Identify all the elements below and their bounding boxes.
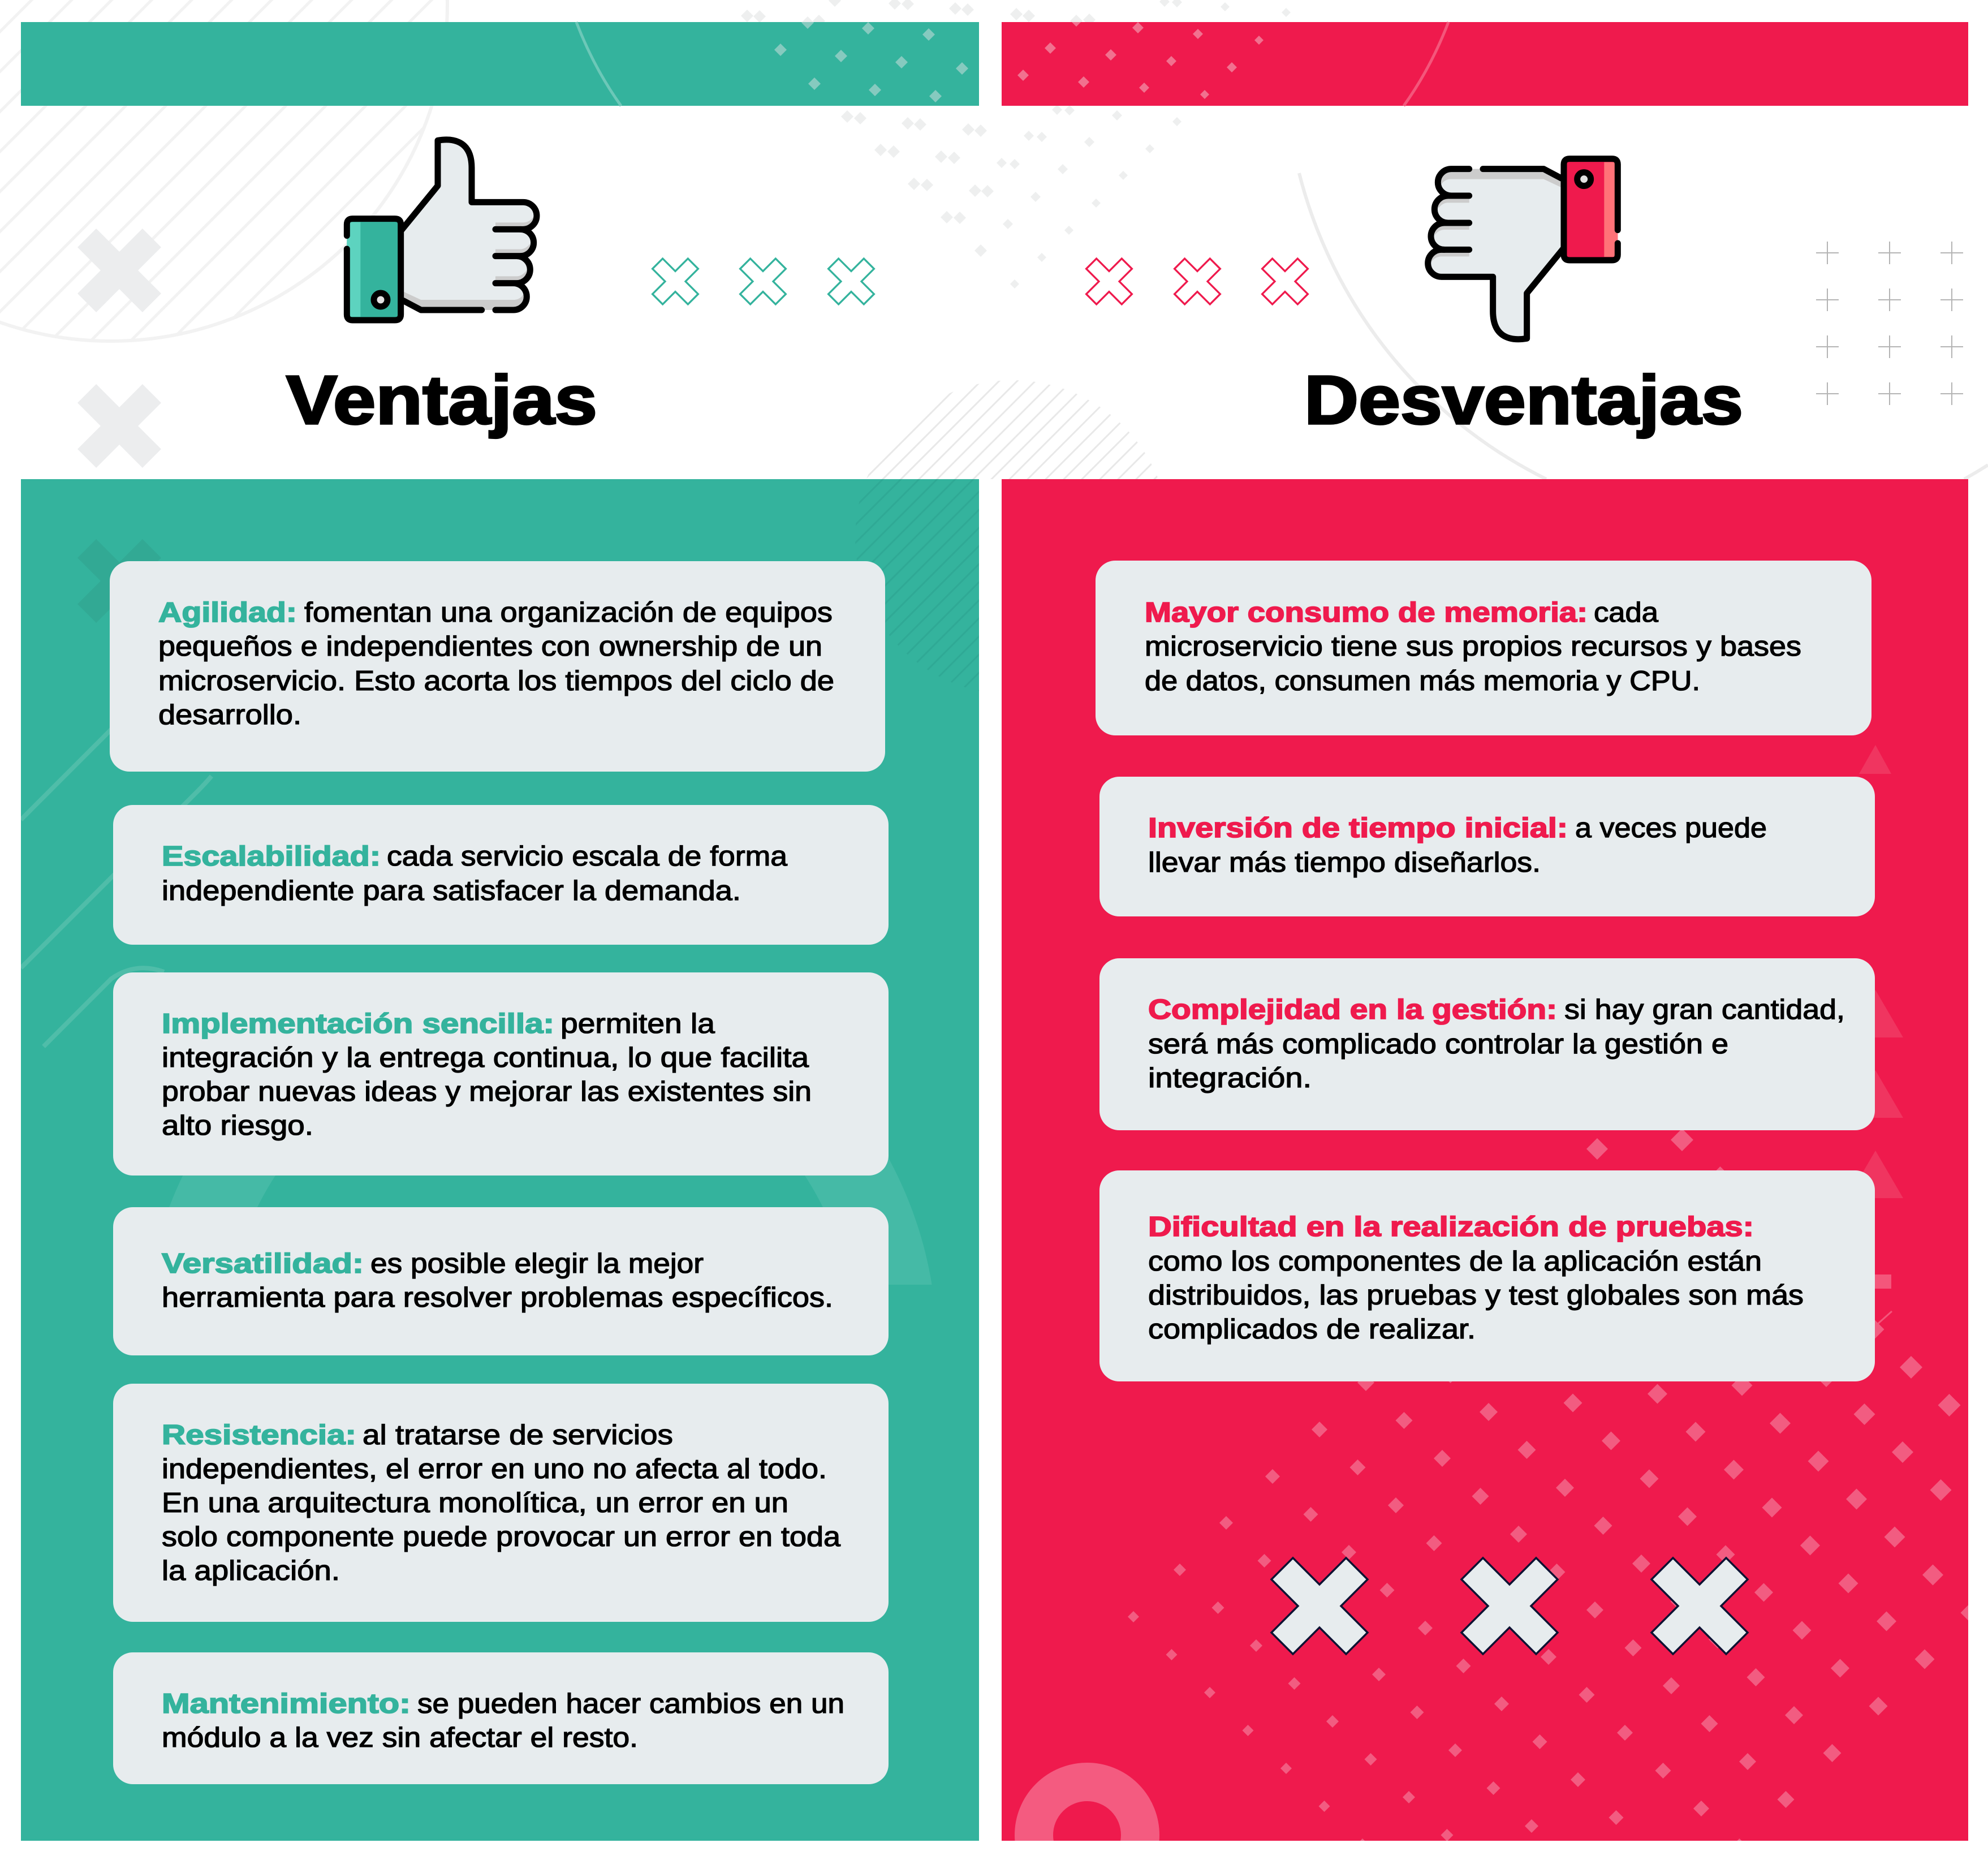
text: Versatilidad <box>162 1248 833 1313</box>
background decoration <box>0 0 1988 479</box>
background X marks <box>77 229 161 468</box>
card: Escalabilidad <box>113 805 889 945</box>
text: Escalabilidad: independiente para satisfacer la demanda. <box>162 876 741 906</box>
icon: plus grid <box>1816 242 1963 405</box>
card: Mantenimiento <box>113 1652 889 1784</box>
text: Dificultad en la realización de pruebas: complicados de realizar. <box>1148 1314 1476 1345</box>
text: Escalabilidad <box>162 841 788 906</box>
label: Complejidad en la gestión: Complejidad en la gestión: <box>1148 994 1557 1025</box>
title: Ventajas: Ventajas <box>286 361 597 438</box>
text: Dificultad en la realización de pruebas: como los componentes de la aplicación están <box>1148 1246 1762 1277</box>
text: Complejidad en la gestión: si hay gran cantidad, <box>1564 994 1845 1025</box>
text: Mantenimiento: se pueden hacer cambios en un <box>417 1689 844 1719</box>
text: Implementación sencilla <box>162 1009 812 1141</box>
label: Inversión de tiempo inicial: Inversión de tiempo inicial: <box>1148 813 1568 843</box>
icon: red outlined X row <box>1086 259 1308 304</box>
panel: desventajas <box>1002 479 1988 1873</box>
label: Mayor consumo de memoria: Mayor consumo de memoria: <box>1145 597 1588 628</box>
icon: thumbs down <box>1428 159 1618 339</box>
icon: thumbs up <box>347 140 537 320</box>
label: Agilidad: Agilidad: <box>158 597 297 628</box>
text: Dificultad en la realización de pruebas: distribuidos, las pruebas y test globales son más <box>1148 1280 1804 1311</box>
text: Agilidad: fomentan una organización de equipos <box>304 597 833 628</box>
card: Implementación sencilla <box>113 972 889 1176</box>
icon: large X row <box>1271 1558 1748 1654</box>
label: Mantenimiento: Mantenimiento: <box>162 1689 411 1719</box>
text: Mayor consumo de memoria: cada <box>1594 597 1659 628</box>
text: Implementación sencilla: integración y la entrega continua, lo que facilita <box>162 1043 809 1073</box>
panel: ventajas <box>21 479 979 1841</box>
card: Agilidad <box>110 561 885 772</box>
diamond pattern <box>1128 1129 1988 1854</box>
text: Resistencia: solo componente puede provocar un error en toda <box>162 1522 841 1552</box>
label: Escalabilidad: Escalabilidad: <box>162 841 381 872</box>
text: Escalabilidad: cada servicio escala de forma <box>387 841 788 872</box>
text: Mantenimiento: módulo a la vez sin afectar el resto. <box>162 1723 638 1753</box>
card: Versatilidad <box>113 1207 889 1355</box>
text: Complejidad en la gestión <box>1148 994 1845 1093</box>
panel: ventajas header bar <box>21 16 979 106</box>
text: Agilidad: desarrollo. <box>158 700 301 730</box>
label: Versatilidad: Versatilidad: <box>162 1248 364 1279</box>
label: Dificultad en la realización de pruebas: Dificultad en la realización de pruebas: <box>1148 1212 1754 1242</box>
text: Resistencia: al tratarse de servicios <box>363 1420 673 1450</box>
text: Resistencia: la aplicación. <box>162 1556 340 1586</box>
card: Complejidad en la gestión <box>1099 958 1875 1130</box>
text: Mantenimiento <box>162 1689 844 1753</box>
text: Dificultad en la realización de pruebas <box>1148 1246 1804 1345</box>
text: Complejidad en la gestión: será más complicado controlar la gestión e <box>1148 1029 1728 1060</box>
text: Mayor consumo de memoria <box>1145 597 1801 696</box>
label: Resistencia: Resistencia: <box>162 1420 356 1450</box>
text: Complejidad en la gestión: integración. <box>1148 1063 1312 1093</box>
text: Resistencia: independientes, el error en uno no afecta al todo. <box>162 1454 827 1484</box>
text: Implementación sencilla: probar nuevas ideas y mejorar las existentes sin <box>162 1077 812 1107</box>
text: Agilidad: microservicio. Esto acorta los tiempos del ciclo de <box>158 666 834 696</box>
text: Inversión de tiempo inicial: a veces puede <box>1575 813 1767 843</box>
text: Resistencia <box>162 1420 841 1586</box>
text: Implementación sencilla: permiten la <box>560 1009 715 1039</box>
text: Inversión de tiempo inicial: llevar más tiempo diseñarlos. <box>1148 847 1541 878</box>
text: Versatilidad: es posible elegir la mejor <box>370 1248 704 1279</box>
card: Resistencia <box>113 1384 889 1622</box>
text: Mayor consumo de memoria: de datos, consumen más memoria y CPU. <box>1145 666 1700 696</box>
card: Mayor consumo de memoria <box>1096 561 1871 735</box>
card: Inversión de tiempo inicial <box>1099 777 1875 916</box>
icon: green outlined X row <box>653 259 874 304</box>
text: Implementación sencilla: alto riesgo. <box>162 1110 313 1141</box>
text: Inversión de tiempo inicial <box>1148 813 1767 878</box>
panel: desventajas header bar <box>1002 15 1968 106</box>
text: Versatilidad: herramienta para resolver problemas específicos. <box>162 1282 833 1313</box>
text: Resistencia: En una arquitectura monolítica, un error en un <box>162 1488 788 1518</box>
title: Desventajas: Desventajas <box>1304 361 1743 438</box>
card: Dificultad en la realización de pruebas <box>1099 1170 1875 1381</box>
text: Agilidad: pequeños e independientes con ownership de un <box>158 631 822 662</box>
text: Agilidad <box>158 597 834 730</box>
text: Mayor consumo de memoria: microservicio tiene sus propios recursos y bases <box>1145 631 1801 662</box>
label: Implementación sencilla: Implementación sencilla: <box>162 1009 554 1039</box>
